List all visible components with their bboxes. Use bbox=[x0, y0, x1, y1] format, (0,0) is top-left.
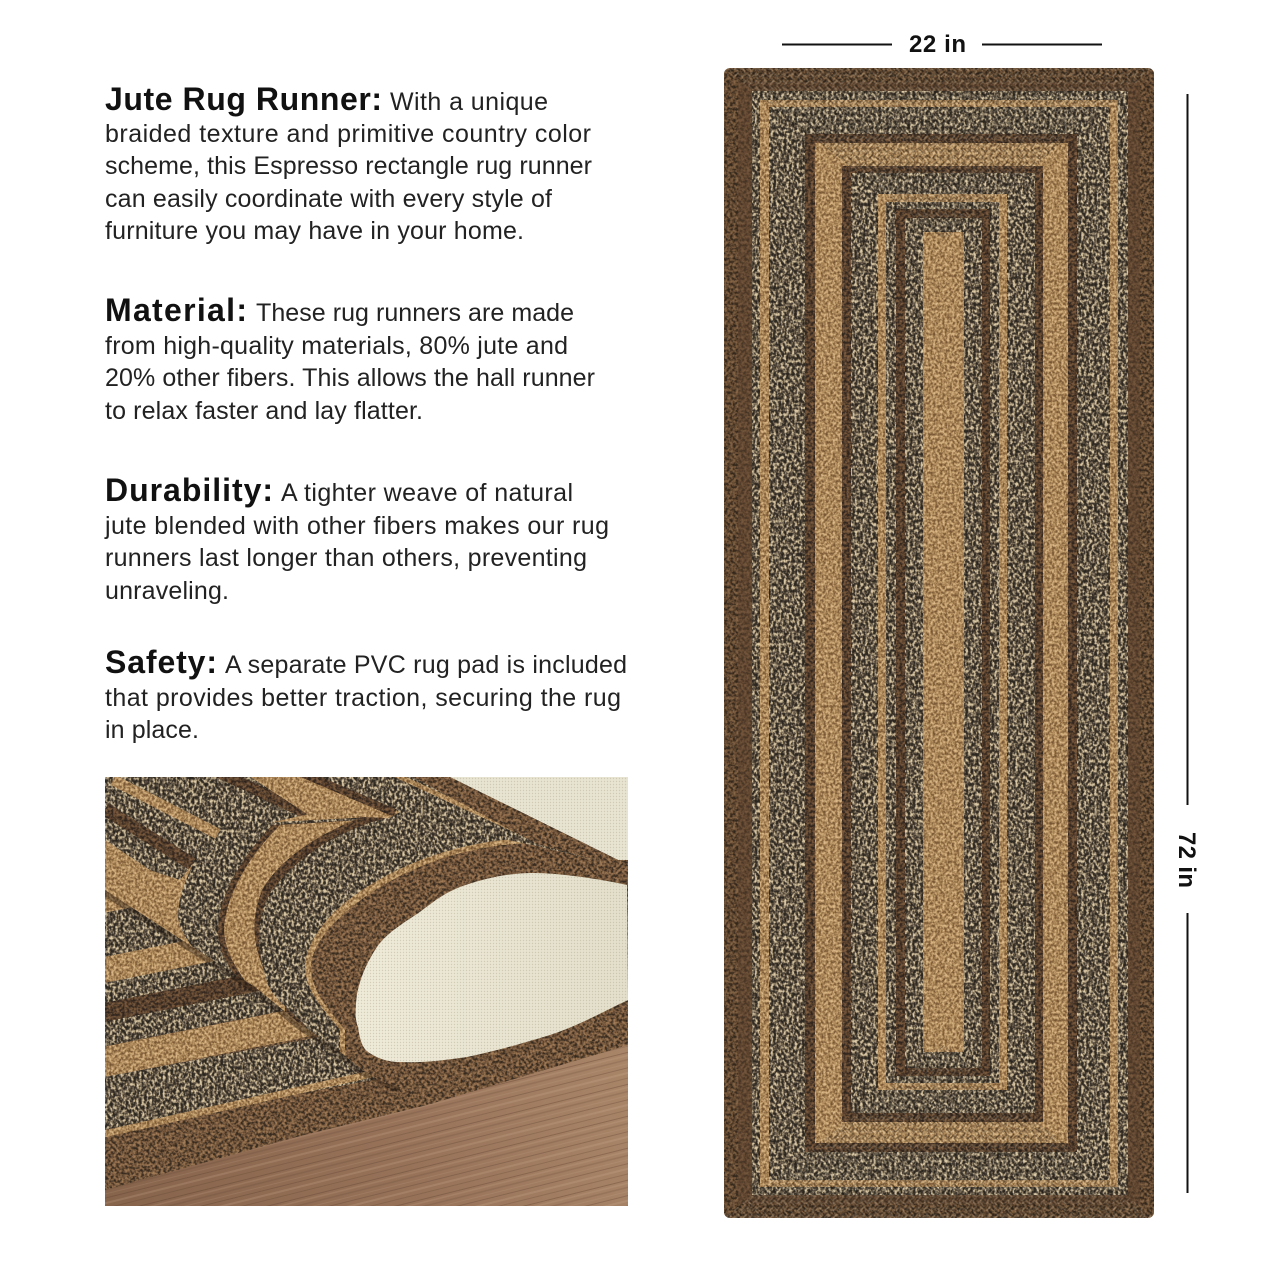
text block: Material: These rug runners are made bbox=[256, 299, 574, 327]
text block: Safety: in place. bbox=[105, 716, 199, 744]
photo: rolled rug corner showing rug pad bbox=[105, 777, 628, 1206]
text block: Jute Rug Runner: furniture you may have in your home. bbox=[105, 217, 524, 245]
rug pad underside opening bbox=[356, 873, 628, 1062]
flat part of rug bbox=[95, 850, 628, 1200]
text block: Safety: that provides better traction, securing the rug bbox=[105, 684, 621, 712]
rug pad backing behind roll bbox=[450, 777, 628, 860]
text block: Jute Rug Runner bbox=[105, 81, 592, 245]
text block: Durability: unraveling. bbox=[105, 577, 229, 605]
text block: Durability: A tighter weave of natural bbox=[281, 479, 573, 507]
width dimension: 22 in: 22 in bbox=[909, 31, 966, 58]
text block: Material: to relax faster and lay flatter. bbox=[105, 397, 423, 425]
text block: Durability: jute blended with other fibers makes our rug bbox=[104, 512, 609, 540]
upper face of roll above the mitred corner bbox=[105, 777, 628, 880]
text block: Jute Rug Runner: With a unique bbox=[390, 88, 548, 116]
text block: Safety: Safety: bbox=[105, 644, 217, 680]
text block: Durability bbox=[104, 472, 609, 605]
rug: braided rectangle runner bbox=[724, 68, 1154, 1218]
text block: Jute Rug Runner: can easily coordinate with every style of bbox=[105, 185, 552, 213]
text block: Jute Rug Runner: scheme, this Espresso rectangle rug runner bbox=[105, 152, 592, 180]
text block: Durability: runners last longer than others, preventing bbox=[105, 544, 587, 572]
text block: Material: from high-quality materials, 80% jute and bbox=[105, 332, 568, 360]
text block: Material: Material: bbox=[105, 292, 247, 328]
wood floor bbox=[105, 1045, 628, 1206]
text block: Safety: A separate PVC rug pad is included bbox=[225, 651, 627, 679]
rolled part of rug bbox=[105, 777, 628, 1088]
text block: Jute Rug Runner: Jute Rug Runner: bbox=[105, 81, 382, 117]
text block: Safety bbox=[105, 644, 627, 744]
text block: Jute Rug Runner: braided texture and primitive country color bbox=[105, 120, 591, 148]
text block: Durability: Durability: bbox=[105, 472, 273, 508]
text block: Material: 20% other fibers. This allows the hall runner bbox=[105, 364, 595, 392]
length dimension: 72 in: 72 in bbox=[1173, 832, 1200, 888]
text block: Material bbox=[105, 292, 595, 425]
